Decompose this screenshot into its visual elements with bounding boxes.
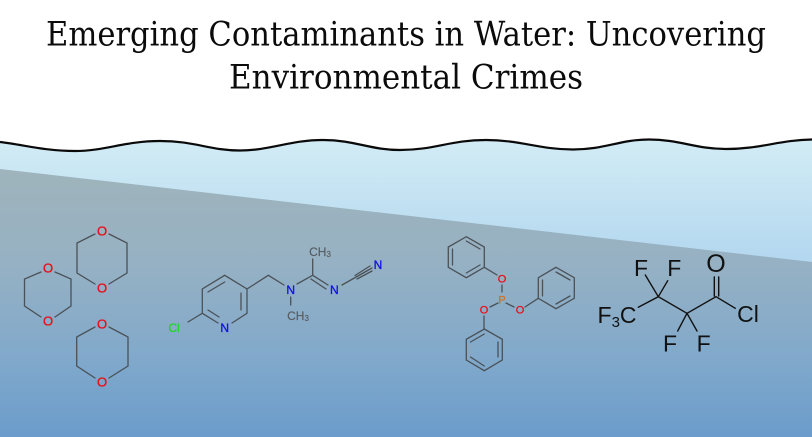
molecule: dioxane left: [24, 260, 71, 328]
molecule: acetamiprid: 3: [326, 250, 331, 258]
molecule: acetamiprid: N: [330, 283, 339, 297]
molecule: dioxane top: O: [97, 224, 107, 238]
title: Emerging Contaminants in Water: Uncovering: [46, 14, 766, 54]
molecule: perfluorobutyryl chloride: F: [667, 255, 681, 281]
molecule: perfluorobutyryl chloride: F: [634, 255, 648, 281]
molecule: acetamiprid: Cl: [168, 321, 180, 335]
molecule: acetamiprid: CH: [287, 309, 304, 323]
molecule: perfluorobutyryl chloride: O: [706, 250, 726, 278]
molecule: perfluorobutyryl chloride: 3: [612, 314, 620, 331]
molecule: triphenyl phosphite: O: [516, 304, 525, 316]
molecule: triphenyl phosphite: P: [498, 294, 506, 306]
molecule: perfluorobutyryl chloride: F: [598, 302, 612, 328]
molecule: acetamiprid: N: [374, 258, 382, 272]
molecule: dioxane top: O: [97, 280, 107, 296]
molecule: dioxane left: O: [43, 260, 53, 276]
molecule: dioxane bottom: O: [97, 316, 107, 332]
molecule: triphenyl phosphite: O: [480, 304, 489, 316]
molecule: perfluorobutyryl chloride: [598, 250, 759, 356]
water surface line: [0, 140, 812, 151]
molecule: acetamiprid: 3: [304, 314, 309, 322]
clean water body: [0, 140, 812, 437]
molecule: dioxane left: O: [43, 314, 53, 328]
molecule: triphenyl phosphite: [448, 237, 574, 371]
molecule: triphenyl phosphite: O: [498, 274, 507, 286]
molecule: perfluorobutyryl chloride: Cl: [737, 301, 759, 327]
molecule: dioxane bottom: [77, 316, 128, 390]
molecule: acetamiprid: N: [286, 283, 295, 297]
contaminated water layer: [0, 169, 812, 437]
title: [46, 14, 766, 96]
molecule: perfluorobutyryl chloride: C: [620, 302, 637, 328]
molecule: perfluorobutyryl chloride: F: [663, 330, 677, 356]
molecule: acetamiprid: CH: [309, 245, 326, 259]
molecule: acetamiprid: N: [220, 321, 229, 335]
title: Environmental Crimes: [229, 58, 583, 96]
molecule: dioxane top: [77, 224, 127, 296]
molecule: acetamiprid: [168, 245, 382, 335]
molecule: dioxane bottom: O: [97, 374, 107, 390]
molecule: perfluorobutyryl chloride: F: [697, 330, 711, 356]
